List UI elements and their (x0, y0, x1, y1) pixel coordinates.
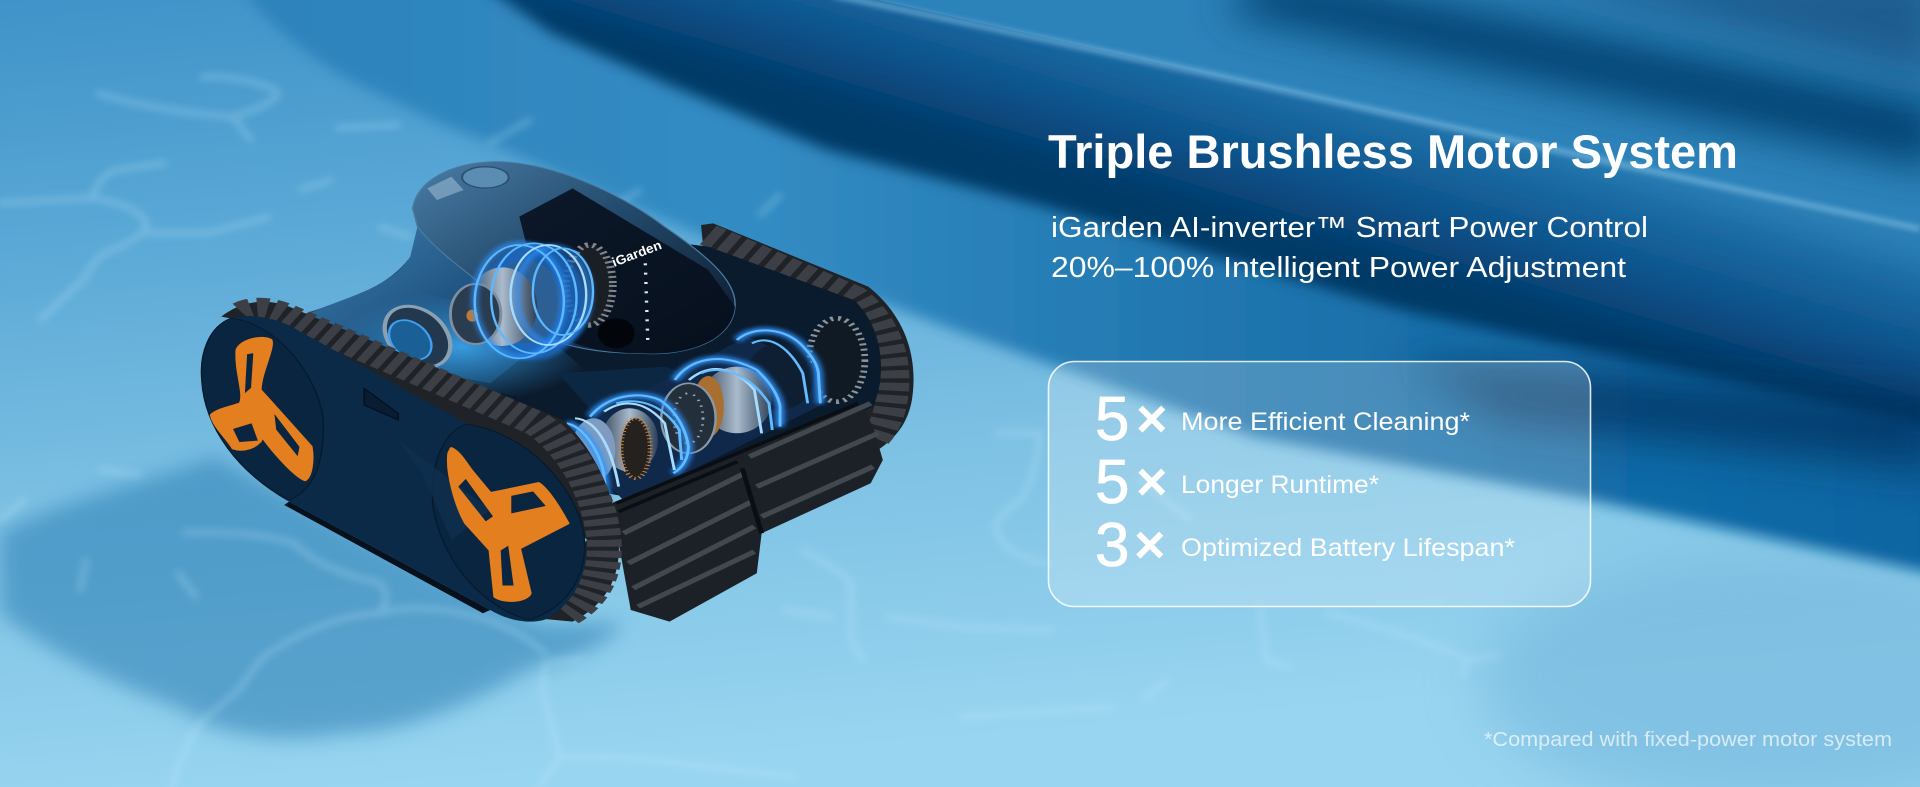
robot brand mark: iGarden (610, 237, 664, 270)
stat row: 5x cleaning: × (1136, 389, 1168, 449)
small rear motor (372, 300, 463, 374)
stat row: 5x runtime: 5 (1095, 448, 1129, 517)
stat row: 3x battery (1095, 511, 1515, 580)
subtitle (1051, 212, 1648, 284)
orange handle: right wheel (449, 448, 568, 601)
robot pool cleaner (201, 162, 914, 622)
stat row: 5x runtime: Longer Runtime* (1181, 471, 1379, 499)
stat row: 5x cleaning: More Efficient Cleaning* (1181, 408, 1470, 436)
orange handle: left wheel (212, 338, 312, 480)
upper motor with blue field rings (450, 243, 613, 360)
stat row: 3x battery: 3 (1095, 511, 1129, 580)
stat row: 3x battery: × (1134, 515, 1166, 575)
stat row: 5x runtime: × (1136, 452, 1168, 512)
transparent dome (413, 162, 735, 354)
lower motor shaft with blue field rings (563, 318, 865, 503)
far side track (701, 223, 914, 450)
stat row: 3x battery: Optimized Battery Lifespan* (1181, 534, 1515, 562)
front roller brushes (611, 402, 883, 622)
body shell (301, 223, 881, 503)
subtitle line 1: iGarden AI-inverter™ Smart Power Control (1051, 212, 1648, 244)
subtitle line 2: 20%–100% Intelligent Power Adjustment (1051, 252, 1626, 284)
stat row: 5x runtime (1095, 448, 1379, 517)
title: Triple Brushless Motor System (1048, 125, 1738, 178)
near side body panel (201, 316, 586, 622)
water caustic light lines (0, 77, 1499, 787)
stat row: 5x cleaning: 5 (1095, 385, 1129, 454)
stat row: 5x cleaning (1095, 385, 1470, 454)
glass stat panel (1048, 362, 1590, 606)
near side track (221, 302, 619, 622)
footnote: *Compared with fixed-power motor system (1484, 729, 1892, 751)
